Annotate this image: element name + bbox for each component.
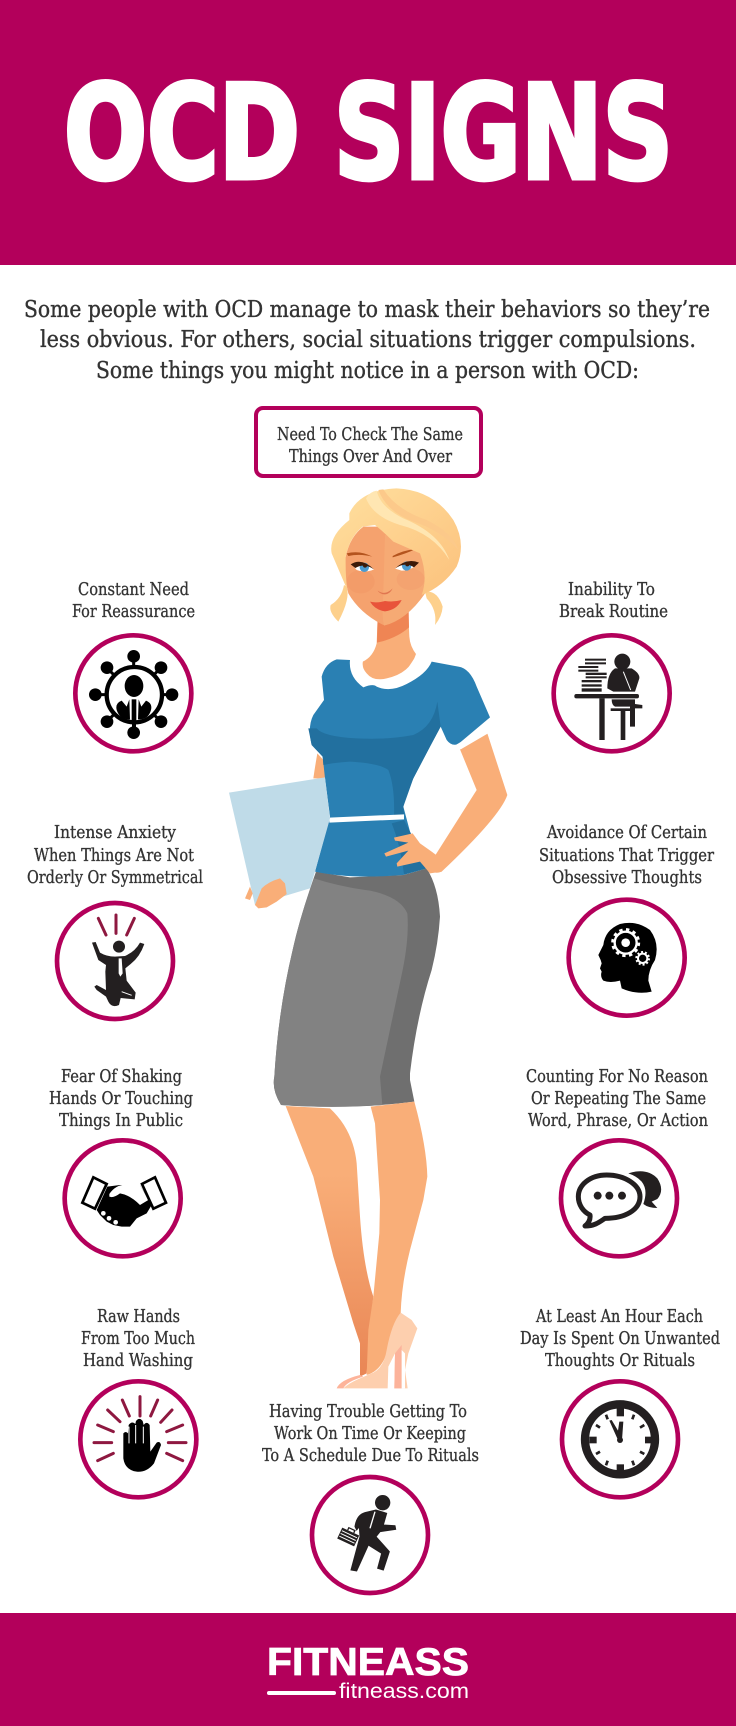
label: Or Repeating The Same bbox=[531, 1088, 706, 1109]
logo rule bbox=[267, 1691, 336, 1695]
hand on folder bbox=[245, 878, 287, 908]
label bbox=[72, 579, 195, 622]
label: Raw Hands bbox=[97, 1306, 180, 1327]
icon: handshake bbox=[65, 1140, 181, 1256]
logo url: fitneass.com bbox=[339, 1680, 469, 1703]
icon: jumping man bbox=[57, 903, 173, 1019]
label: Thoughts Or Rituals bbox=[545, 1350, 695, 1371]
icon: running businessman bbox=[312, 1477, 428, 1593]
footer banner bbox=[0, 1613, 736, 1726]
label: Things In Public bbox=[59, 1110, 183, 1131]
label: Counting For No Reason bbox=[526, 1066, 708, 1087]
label: Hands Or Touching bbox=[49, 1088, 193, 1109]
panel: fear of shaking hands bbox=[49, 1066, 193, 1256]
label: From Too Much bbox=[81, 1328, 195, 1349]
right arm bbox=[430, 733, 507, 873]
label bbox=[49, 1066, 193, 1131]
icon: clock bbox=[562, 1381, 678, 1497]
panel: inability to break routine bbox=[554, 579, 670, 751]
panel: trouble getting to work bbox=[262, 1401, 479, 1593]
skirt bbox=[274, 868, 440, 1107]
illustration: woman with folder bbox=[229, 488, 507, 1388]
callout: need to check bbox=[256, 408, 481, 476]
intro text: Some people with OCD manage to mask their behaviors so they’re bbox=[24, 297, 710, 323]
label: Word, Phrase, Or Action bbox=[528, 1110, 708, 1131]
label: Hand Washing bbox=[83, 1350, 193, 1371]
label bbox=[27, 822, 203, 888]
logo: FITNEASS: FITNEASS bbox=[267, 1641, 469, 1684]
intro text bbox=[24, 297, 710, 384]
intro text: less obvious. For others, social situations trigger compulsions. bbox=[40, 327, 696, 353]
folder bbox=[229, 777, 330, 905]
neck shadow bbox=[377, 610, 409, 643]
icon: head with gears bbox=[569, 900, 685, 1016]
face bbox=[345, 527, 427, 626]
front leg bbox=[367, 1102, 427, 1375]
blouse bbox=[308, 659, 490, 877]
panel: counting for no reason bbox=[526, 1066, 708, 1256]
hair back curls bbox=[330, 585, 443, 625]
label: Situations That Trigger bbox=[539, 845, 714, 866]
icon: speech bubbles bbox=[561, 1140, 677, 1256]
label: Work On Time Or Keeping bbox=[274, 1423, 466, 1444]
label bbox=[262, 1401, 479, 1466]
label: At Least An Hour Each bbox=[535, 1306, 703, 1327]
intro text: Some things you might notice in a person with OCD: bbox=[96, 358, 639, 384]
label: Intense Anxiety bbox=[54, 822, 177, 843]
label: To A Schedule Due To Rituals bbox=[262, 1445, 479, 1466]
label: Obsessive Thoughts bbox=[552, 867, 702, 888]
callout: need to check: Things Over And Over bbox=[289, 446, 452, 467]
header banner bbox=[0, 0, 736, 265]
label: Having Trouble Getting To bbox=[269, 1401, 467, 1422]
high heel shoe bbox=[337, 1313, 417, 1388]
callout: need to check: Need To Check The Same bbox=[277, 424, 463, 445]
hand on hip bbox=[384, 833, 442, 873]
panel: raw hands bbox=[80, 1306, 196, 1497]
label: For Reassurance bbox=[72, 601, 195, 622]
icon: person network bbox=[75, 635, 191, 751]
back arm bbox=[313, 753, 326, 778]
icon: raised hand with rays bbox=[80, 1381, 196, 1497]
label: Orderly Or Symmetrical bbox=[27, 867, 203, 888]
panel: avoidance of certain situations bbox=[539, 822, 714, 1016]
label: Fear Of Shaking bbox=[61, 1066, 182, 1087]
neck bbox=[363, 613, 417, 680]
label bbox=[520, 1306, 720, 1371]
label bbox=[81, 1306, 195, 1371]
icon: person at desk with books bbox=[554, 635, 670, 751]
hair bbox=[331, 488, 461, 595]
label bbox=[539, 822, 714, 888]
label bbox=[526, 1066, 708, 1131]
label: Avoidance Of Certain bbox=[546, 822, 707, 843]
panel: constant need for reassurance bbox=[72, 579, 195, 751]
label: Constant Need bbox=[78, 579, 189, 600]
panel: at least an hour each day bbox=[520, 1306, 720, 1497]
back leg bbox=[286, 1106, 373, 1377]
panel: intense anxiety bbox=[27, 822, 203, 1019]
collar bbox=[350, 654, 432, 689]
label: Break Routine bbox=[559, 601, 668, 622]
label: Inability To bbox=[568, 579, 655, 600]
label bbox=[559, 579, 668, 622]
label: When Things Are Not bbox=[34, 845, 194, 866]
